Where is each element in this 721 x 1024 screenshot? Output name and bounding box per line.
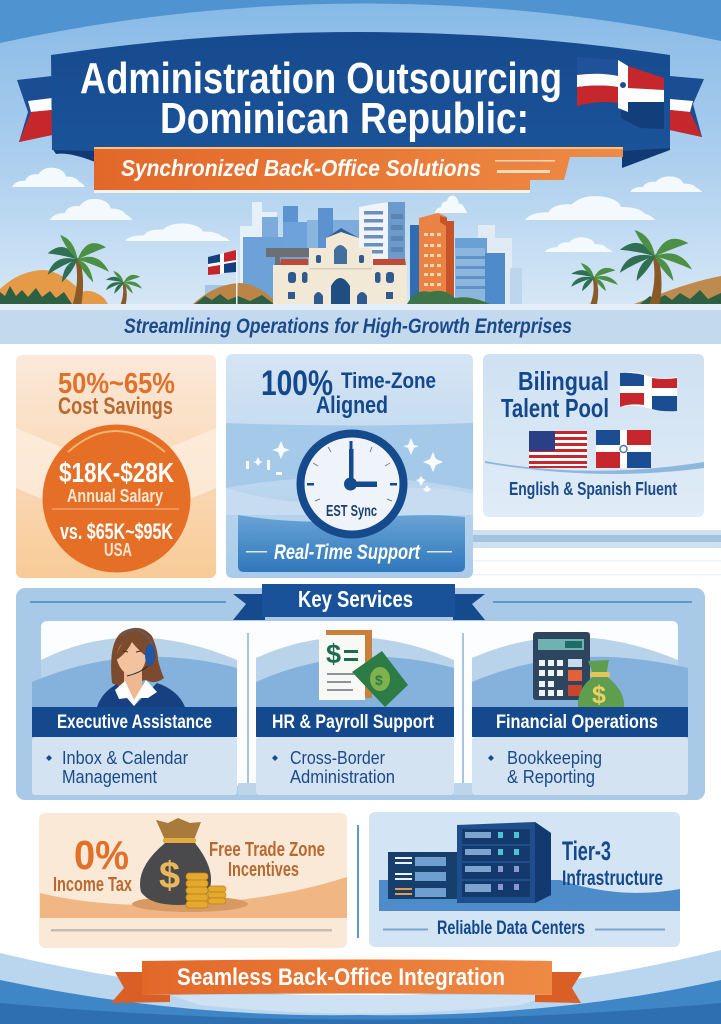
card: financial operations [472,632,688,795]
small flag on pole [208,250,238,304]
icon: sparkles [246,438,443,492]
icon: money bag with coins: $ [159,855,180,897]
clouds [12,168,702,252]
panel: free trade zone: Incentives [228,859,299,881]
title text [80,54,562,143]
title text: Dominican Republic: [160,94,529,143]
card: hr and payroll: Cross-Border [290,747,385,768]
footer ribbon: Seamless Back-Office Integration [177,964,505,991]
title text: Administration Outsourcing [80,54,562,103]
card: hr and payroll: HR & Payroll Support [272,712,435,733]
panel: free trade zone [39,813,347,948]
real-time support strip: Real-Time Support [274,541,421,564]
panel: free trade zone: 0% [74,832,129,878]
orange subtitle ribbon [94,147,623,193]
panel: tier-3 infrastructure: Tier-3 [562,836,611,866]
icon: calculator and money bag [533,632,624,709]
icon: money bag with coins [132,818,248,912]
orange subtitle ribbon: Synchronized Back-Office Solutions [121,155,481,181]
panel: tier-3 infrastructure [369,812,680,947]
card: financial operations: & Reporting [507,766,595,787]
panel: cost savings: 50%~65% [58,368,175,400]
salary circle: USA [104,540,132,560]
panel: key services [16,584,705,800]
card: hr and payroll [256,630,454,795]
panel: cost savings: Cost Savings [58,393,173,420]
panel: time-zone aligned: Aligned [316,392,388,419]
icon: payroll document and banknote [319,630,408,707]
card: executive assistance: Inbox & Calendar [62,747,188,768]
key services ribbon: Key Services [298,586,413,612]
panel: bilingual talent pool: Talent Pool [501,393,609,423]
salary circle: vs. $65K~$95K [60,519,173,544]
panel: bilingual talent pool: English & Spanish Fluent [509,479,677,499]
panel: cost savings [16,355,216,578]
panel: tier-3 infrastructure: Infrastructure [562,867,663,890]
panel: tier-3 infrastructure: Reliable Data Centers [437,918,585,939]
subtitle band [0,304,721,344]
skyline [205,202,522,304]
panel: time-zone aligned: 100% [261,364,333,403]
card: financial operations: Bookkeeping [507,747,602,768]
salary circle: Annual Salary [67,486,163,506]
divider [357,825,359,938]
banner body [51,32,670,151]
decorative stripes [473,530,721,576]
icon: clock [300,434,404,534]
salary circle: $18K-$28K [59,457,174,488]
icon: clock: EST Sync [326,503,377,520]
icon: payroll document and banknote: $ [375,672,383,688]
icon: servers [388,822,551,903]
card: executive assistance: Executive Assistance [57,712,212,733]
footer waves [0,950,721,1024]
banner tails [17,76,704,168]
panel: bilingual talent pool: Bilingual [518,366,609,396]
card: financial operations: Financial Operations [496,712,658,733]
orange tower [419,213,454,304]
icon: US flag [529,431,587,468]
card: hr and payroll: Administration [290,766,395,787]
subtitle band: Streamlining Operations for High-Growth Enterprises [124,315,572,338]
panel: free trade zone: Income Tax [53,874,132,896]
colonial building [266,228,407,304]
title banner [17,32,704,193]
panel: time-zone aligned [226,354,473,578]
key services ribbon [233,584,485,620]
hills and vegetation [0,270,721,304]
real-time support strip [238,515,465,572]
palm trees [48,230,692,304]
panel: free trade zone: Free Trade Zone [209,839,325,861]
card: executive assistance [32,628,237,795]
icon: calculator and money bag: $ [592,681,606,709]
icon: support agent [97,628,185,707]
icon: Dominican flag [620,372,677,411]
card: executive assistance: Management [62,766,157,787]
panel: bilingual talent pool [483,354,704,517]
icon: Dominican flag 2 [596,430,651,468]
flag on banner [577,57,664,129]
salary circle [42,424,190,572]
footer ribbon [111,960,582,1003]
icon: payroll document and banknote: $ [326,639,341,669]
panel: time-zone aligned: Time-Zone [341,368,436,393]
